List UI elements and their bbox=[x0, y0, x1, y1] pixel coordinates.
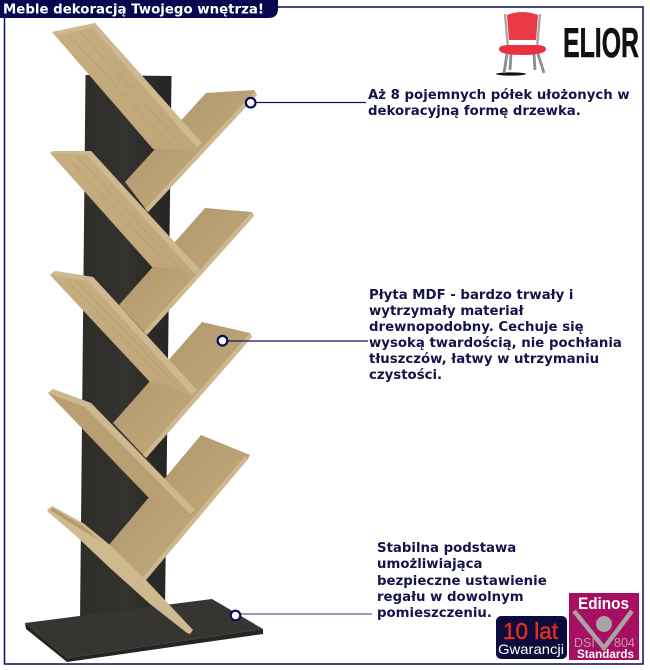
callout text 2: drewnopodobny. Cechuje się bbox=[369, 320, 584, 335]
badge: Edinos standards: Standards bbox=[577, 649, 634, 661]
icon: red chair bbox=[496, 12, 546, 76]
logo: Elior chair and wordmark bbox=[496, 12, 639, 76]
callout text 3: bezpieczne ustawienie bbox=[377, 574, 547, 589]
shelf tier 3 bbox=[50, 271, 252, 458]
shelf tier 1 bbox=[52, 23, 257, 212]
callout text 3: pomieszczeniu. bbox=[377, 606, 492, 621]
callout text 2: tłuszczów, łatwy w utrzymaniu bbox=[369, 351, 599, 367]
callout line 3 bbox=[231, 611, 372, 620]
base plate bbox=[25, 599, 263, 662]
title banner: Meble dekoracją Twojego wnętrza! bbox=[3, 2, 264, 18]
badge: 10 years warranty: 10 lat bbox=[503, 618, 559, 644]
badge: Edinos standards: 804 bbox=[614, 636, 635, 650]
badge: 10 years warranty bbox=[496, 616, 567, 659]
callout text 3: umożliwiająca bbox=[377, 557, 483, 572]
callout line 1 bbox=[246, 98, 366, 107]
badge: Edinos standards: DSI bbox=[574, 636, 595, 650]
shelf tier 4 bbox=[48, 389, 250, 580]
callout text 1: dekoracyjną formę drzewka. bbox=[368, 104, 581, 119]
callout text 2: Płyta MDF - bardzo trwały i bbox=[369, 288, 573, 303]
callout text 3: Stabilna podstawa bbox=[377, 541, 516, 556]
callout text 2: wytrzymały materiał bbox=[369, 304, 525, 319]
tree bookshelf product illustration bbox=[25, 23, 263, 662]
shelf tier 5 bbox=[47, 506, 193, 634]
callout text 3: regału w dowolnym bbox=[377, 590, 524, 605]
callout text 2: czystości. bbox=[369, 367, 442, 383]
callout text 1: Aż 8 pojemnych półek ułożonych w bbox=[368, 87, 630, 103]
callout text 2: wysoką twardością, nie pochłania bbox=[369, 335, 622, 351]
shelf tier 2 bbox=[50, 151, 254, 335]
callout line 2 bbox=[218, 336, 368, 346]
badge: Edinos standards bbox=[569, 593, 639, 661]
dark back panel bbox=[80, 75, 172, 622]
badge: 10 years warranty: Gwarancji bbox=[498, 641, 564, 657]
badge: Edinos standards: Edinos bbox=[578, 594, 629, 613]
